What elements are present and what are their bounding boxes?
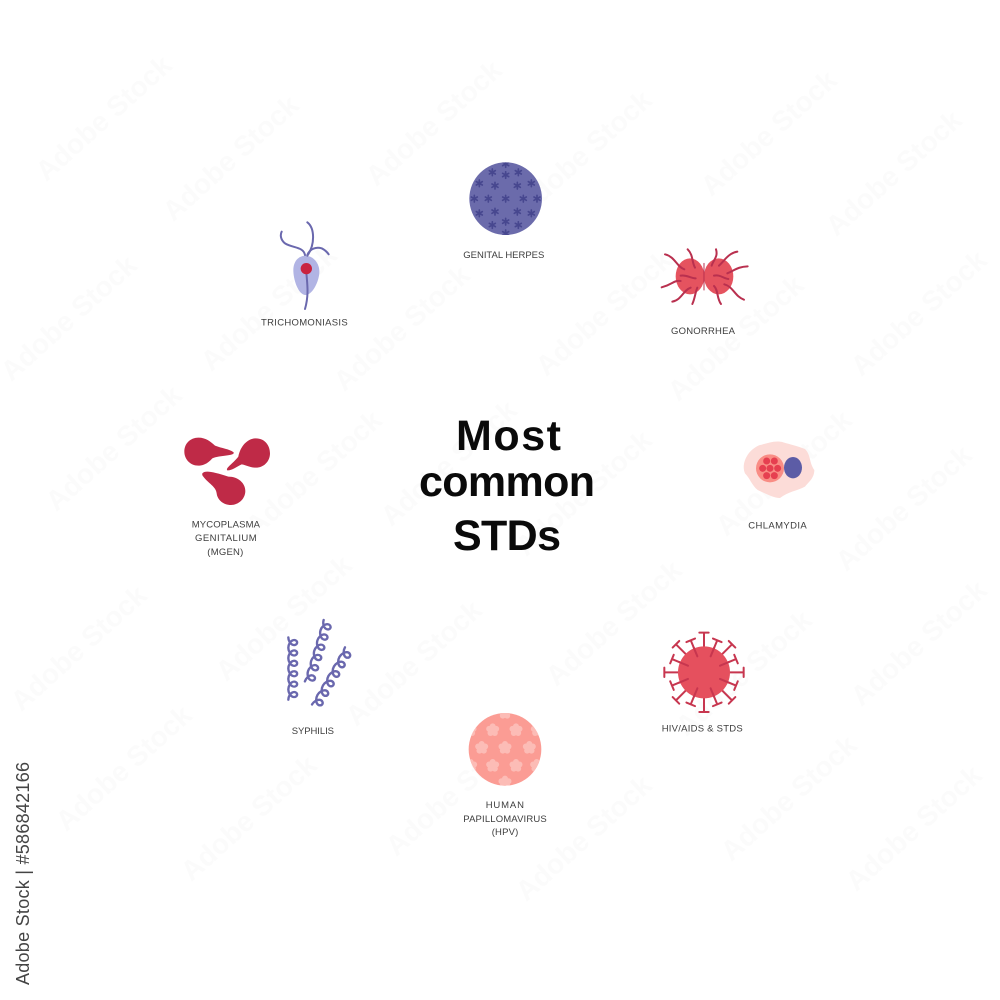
title xyxy=(419,412,595,560)
watermark pattern: Adobe Stock xyxy=(670,604,818,742)
stock credit: Adobe Stock | #586842166 xyxy=(13,762,33,985)
watermark pattern: Adobe Stock xyxy=(695,64,843,202)
watermark pattern: Adobe Stock xyxy=(328,259,476,397)
label: hpv: PAPILLOMAVIRUS xyxy=(463,814,547,825)
watermark pattern: Adobe Stock xyxy=(510,424,658,562)
label: hpv: (HPV) xyxy=(492,827,518,838)
icon: hiv virus xyxy=(664,633,744,712)
watermark pattern: Adobe Stock xyxy=(540,554,688,692)
watermark pattern: Adobe Stock xyxy=(30,49,178,187)
watermark pattern: Adobe Stock xyxy=(830,439,978,577)
icon: mycoplasma xyxy=(184,438,270,505)
label: genital herpes: GENITAL HERPES xyxy=(463,250,544,261)
watermark pattern: Adobe Stock xyxy=(240,404,388,542)
watermark pattern: Adobe Stock xyxy=(710,404,858,542)
icon: chlamydia xyxy=(744,442,814,498)
label: hpv xyxy=(463,800,547,838)
icon: syphilis xyxy=(288,620,353,709)
label: hiv/aids: HIV/AIDS & STDS xyxy=(662,724,743,735)
watermark pattern: Adobe Stock xyxy=(5,579,153,717)
watermark pattern: Adobe Stock xyxy=(50,699,198,837)
icon: trichomonas xyxy=(281,222,329,309)
watermark pattern: Adobe Stock xyxy=(845,244,993,382)
watermark pattern: Adobe Stock xyxy=(840,759,988,897)
title: Most xyxy=(456,412,561,460)
icon: human papillomavirus xyxy=(468,713,542,786)
watermark pattern: Adobe Stock xyxy=(820,104,968,242)
watermark pattern: Adobe Stock xyxy=(360,54,508,192)
icon: genital herpes xyxy=(469,161,542,237)
watermark pattern: Adobe Stock xyxy=(375,394,523,532)
watermark pattern: Adobe Stock xyxy=(662,269,810,407)
watermark pattern: Adobe Stock xyxy=(40,379,188,517)
watermark pattern: Adobe Stock xyxy=(195,239,343,377)
label: mycoplasma: GENITALIUM xyxy=(195,533,257,544)
watermark pattern: Adobe Stock xyxy=(210,549,358,687)
icon: gonorrhea xyxy=(662,249,748,304)
watermark pattern: Adobe Stock xyxy=(510,84,658,222)
title: common xyxy=(419,458,595,506)
watermark pattern: Adobe Stock xyxy=(380,724,528,862)
watermark pattern: Adobe Stock xyxy=(715,729,863,867)
label: trichomoniasis: TRICHOMONIASIS xyxy=(261,318,348,329)
label: gonorrhea: GONORRHEA xyxy=(671,326,736,337)
label: mycoplasma xyxy=(192,519,261,558)
label: mycoplasma: (MGEN) xyxy=(207,547,243,558)
label: syphilis: SYPHILIS xyxy=(292,726,334,737)
label: hpv: HUMAN xyxy=(486,800,524,811)
label: mycoplasma: MYCOPLASMA xyxy=(192,519,261,530)
watermark pattern: Adobe Stock xyxy=(510,769,658,907)
title: STDs xyxy=(453,512,561,560)
watermark pattern: Adobe Stock xyxy=(175,749,323,887)
label: chlamydia: CHLAMYDIA xyxy=(748,520,807,532)
watermark pattern: Adobe Stock xyxy=(340,594,488,732)
watermark pattern: Adobe Stock xyxy=(157,89,305,227)
watermark pattern: Adobe Stock xyxy=(530,244,678,382)
watermark pattern: Adobe Stock xyxy=(845,574,993,712)
